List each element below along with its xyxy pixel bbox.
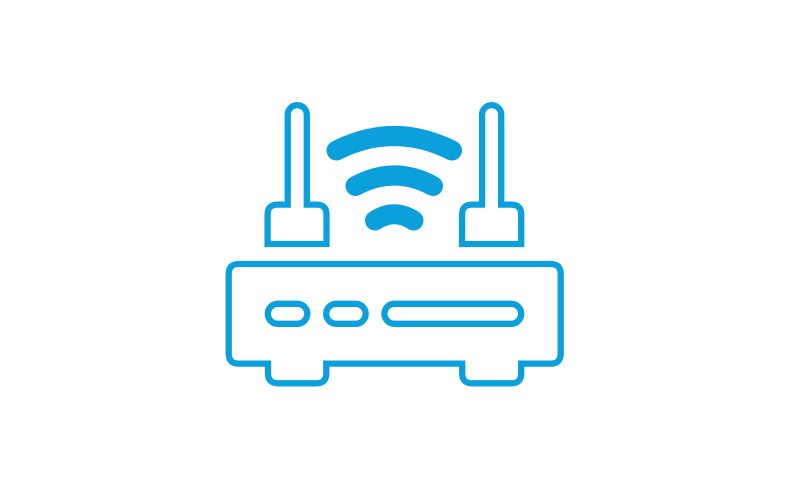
- indicator light: first: [268, 304, 307, 324]
- router body with feet: [229, 264, 561, 383]
- wifi arc: medium: [356, 176, 433, 186]
- left antenna: [268, 105, 326, 244]
- right antenna: [462, 105, 521, 244]
- wifi signal arcs: [336, 136, 452, 220]
- indicator light: second: [326, 304, 366, 324]
- wifi arc: large: [336, 136, 452, 150]
- display slot: [384, 304, 521, 324]
- wifi arc: small: [375, 214, 414, 220]
